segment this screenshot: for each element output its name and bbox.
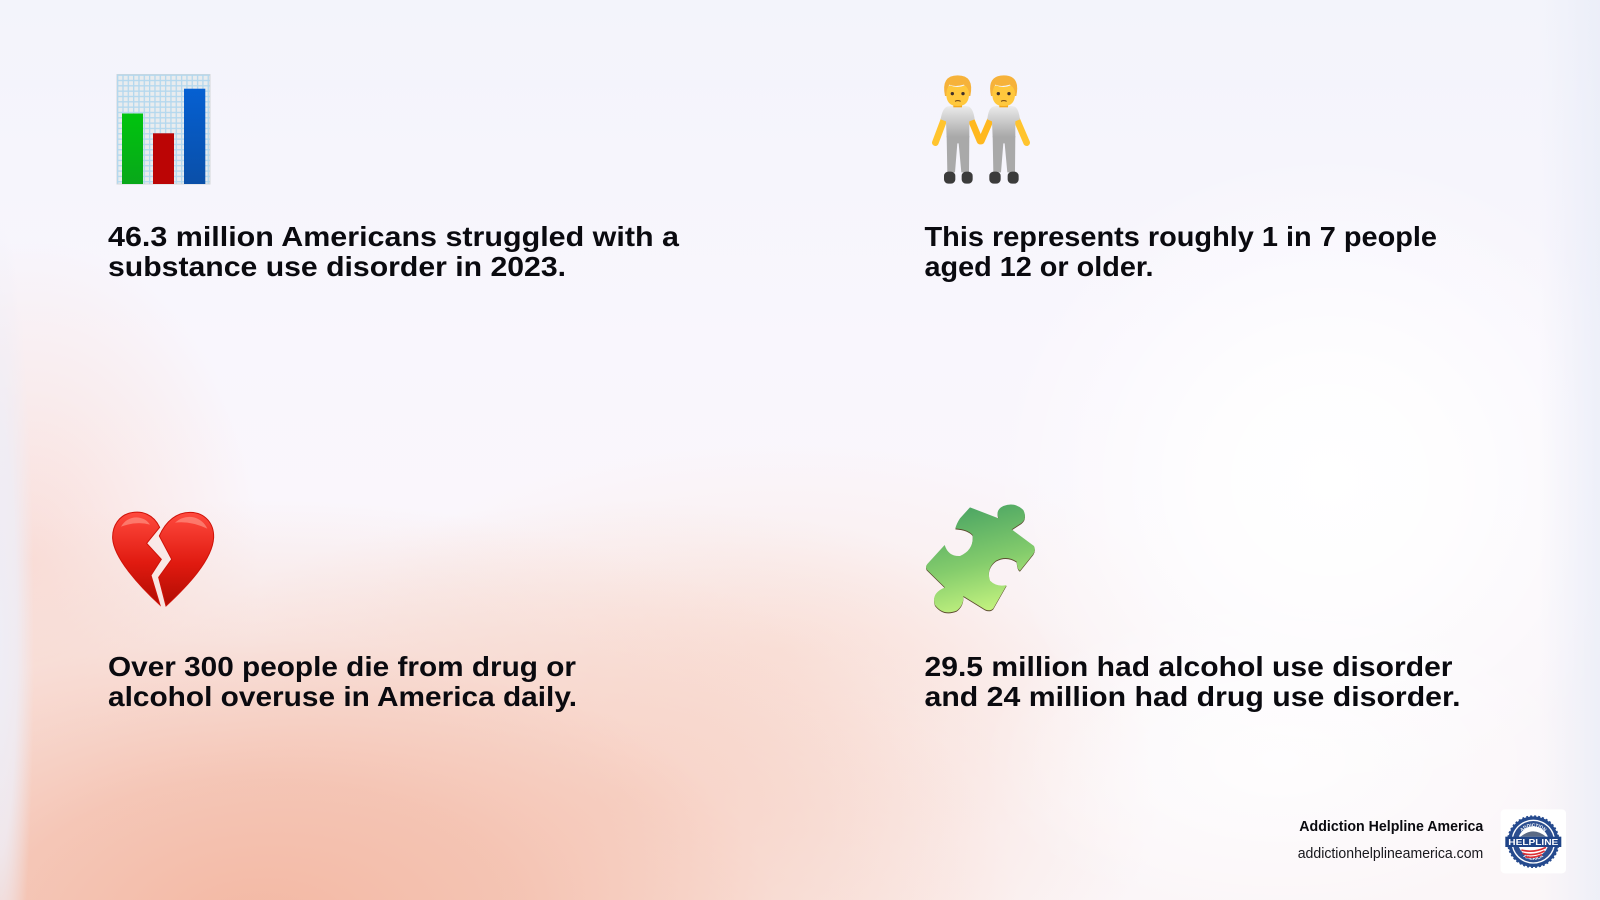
brand footer bbox=[1298, 810, 1566, 874]
text: stat 2: aged 12 or older. bbox=[924, 251, 1154, 282]
brand name: Addiction Helpline America bbox=[1299, 819, 1484, 835]
icon: helpline logo: AMERICA bbox=[1523, 854, 1544, 860]
icon: two people holding hands bbox=[935, 75, 1027, 184]
brand url: addictionhelplineamerica.com bbox=[1298, 846, 1483, 862]
stat 2: people icon and text bbox=[924, 75, 1437, 282]
icon: bar chart bbox=[117, 74, 210, 184]
icon: helpline logo: ADDICTION bbox=[1520, 823, 1547, 832]
text: stat 3: Over 300 people die from drug or bbox=[108, 651, 576, 682]
text: stat 3: alcohol overuse in America daily. bbox=[108, 681, 577, 712]
icon: helpline logo bbox=[1501, 810, 1566, 874]
text: stat 1: 46.3 million Americans struggled with a bbox=[108, 221, 679, 252]
text: stat 2: This represents roughly 1 in 7 people bbox=[924, 221, 1437, 252]
text: stat 1: substance use disorder in 2023. bbox=[108, 251, 566, 282]
text: stat 4: and 24 million had drug use disorder. bbox=[924, 681, 1460, 712]
icon: broken heart bbox=[113, 512, 214, 606]
stat 1: bar chart icon and text bbox=[108, 74, 679, 282]
icon: helpline logo: HELPLINE bbox=[1508, 837, 1559, 847]
icon: puzzle piece bbox=[926, 505, 1035, 613]
text: stat 4: 29.5 million had alcohol use disorder bbox=[924, 651, 1453, 682]
stat 4: puzzle piece icon and text bbox=[924, 505, 1460, 712]
stat 3: broken heart icon and text bbox=[108, 512, 577, 712]
